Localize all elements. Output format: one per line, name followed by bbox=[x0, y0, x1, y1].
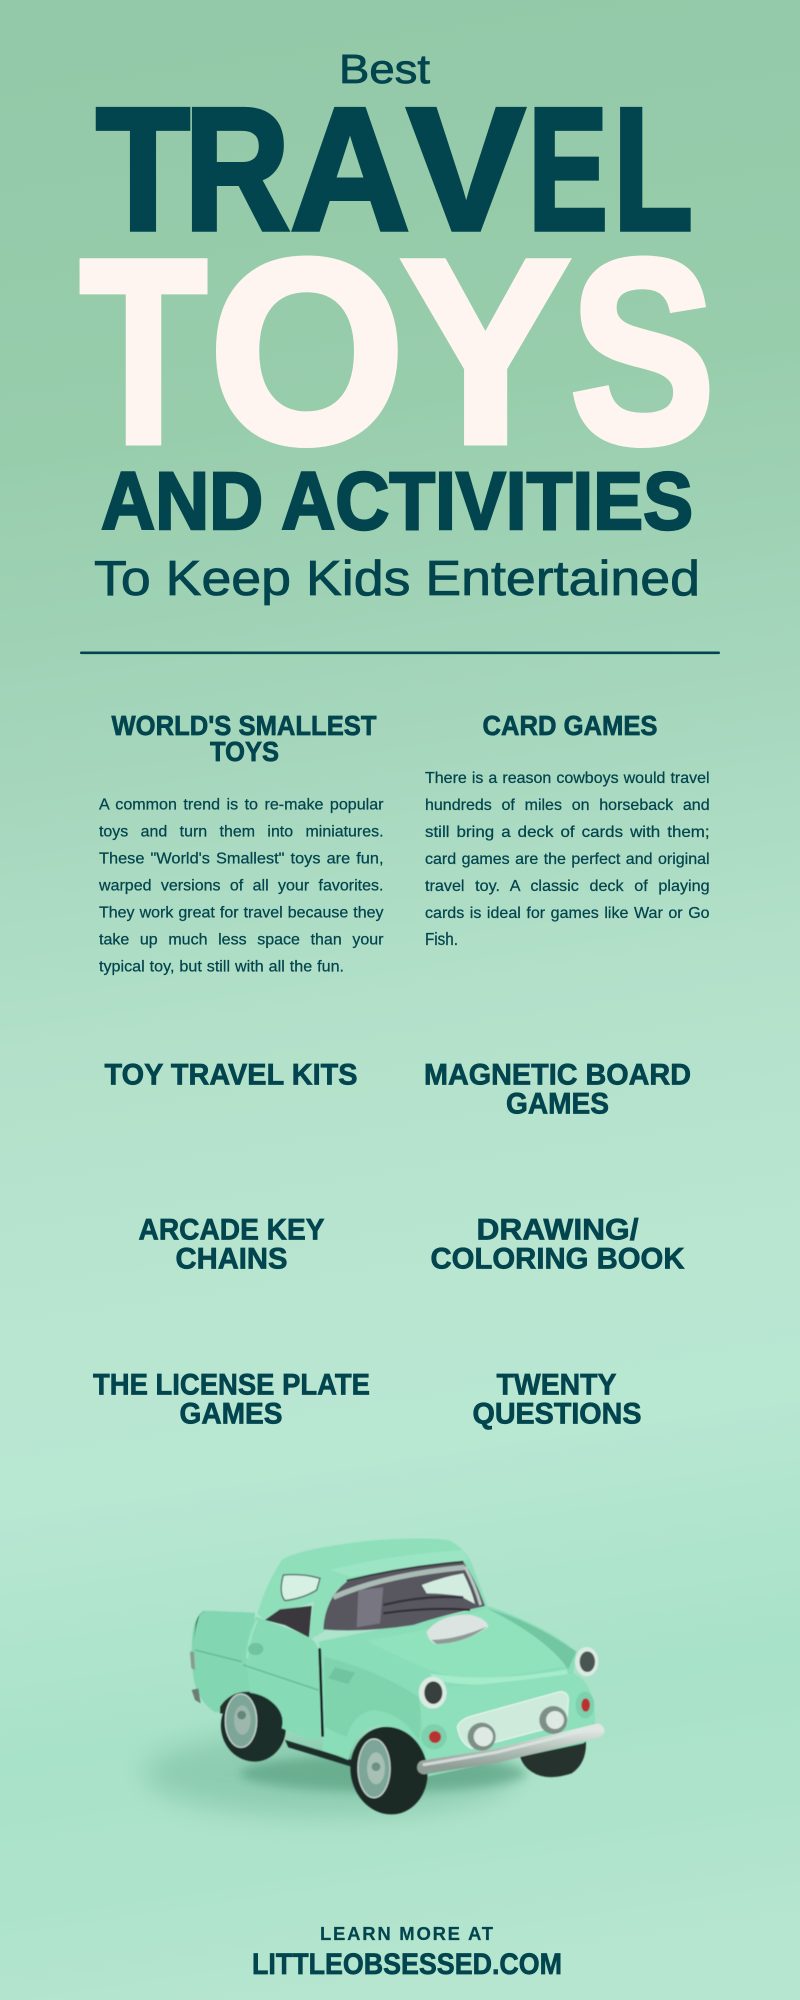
hood side fold bbox=[488, 1609, 576, 1669]
right indicator bbox=[576, 1692, 594, 1718]
heading: magnetic board games: MAGNETIC BOARD bbox=[424, 1058, 691, 1091]
text block: world's smallest toys: typical toy, but still with all the fun. bbox=[99, 958, 344, 976]
panel: card games bbox=[425, 710, 710, 949]
title bbox=[80, 46, 715, 606]
rear wheel bbox=[214, 1686, 292, 1768]
fog lamps bbox=[468, 1706, 567, 1751]
website: LITTLEOBSESSED.COM bbox=[252, 1948, 562, 1981]
hood scoop bbox=[427, 1615, 488, 1644]
text block: card games: travel toy. A classic deck of playing bbox=[425, 878, 710, 895]
heading: world's smallest toys: WORLD'S SMALLEST bbox=[112, 710, 377, 741]
title line: TRAVEL: L bbox=[613, 72, 693, 268]
heading: arcade key chains: ARCADE KEY bbox=[138, 1213, 324, 1246]
rear body bbox=[192, 1611, 255, 1712]
heading: toy travel kits: TOY TRAVEL KITS bbox=[104, 1058, 358, 1091]
side window bbox=[281, 1575, 320, 1601]
heading: magnetic board games: GAMES bbox=[506, 1087, 609, 1120]
main body bbox=[319, 1607, 603, 1777]
learn more at: LEARN MORE AT bbox=[320, 1923, 494, 1944]
under-door shadow bbox=[285, 1740, 352, 1767]
text block: world's smallest toys: warped versions of all your favorites. bbox=[98, 878, 384, 894]
title line: TOYS: Y bbox=[401, 205, 570, 498]
title line: TRAVEL: V bbox=[407, 72, 525, 268]
door gap bbox=[320, 1648, 323, 1737]
heading: drawing/coloring book: DRAWING/ bbox=[476, 1213, 639, 1246]
heading: the license plate games bbox=[93, 1368, 370, 1430]
roof and pillars bbox=[257, 1538, 488, 1640]
far front wheel bbox=[520, 1742, 586, 1777]
heading: twenty questions: TWENTY bbox=[496, 1368, 616, 1401]
roof highlight bbox=[330, 1550, 468, 1577]
front fascia bbox=[418, 1673, 595, 1767]
heading: arcade key chains bbox=[138, 1213, 324, 1275]
left headlight bbox=[419, 1677, 447, 1709]
front wheel bbox=[342, 1720, 436, 1822]
bumper bbox=[424, 1727, 597, 1767]
text block: card games: card games are the perfect and original bbox=[425, 851, 710, 868]
title line: TOYS: O bbox=[209, 205, 405, 498]
text block: card games: Fish. bbox=[425, 929, 458, 949]
heading: the license plate games: GAMES bbox=[180, 1397, 282, 1430]
subtitle: To Keep Kids Entertained bbox=[94, 552, 700, 606]
title line: Best: Best bbox=[339, 46, 431, 92]
fender shading bbox=[324, 1657, 421, 1740]
panel: world's smallest toys bbox=[98, 710, 384, 976]
heading: card games: CARD GAMES bbox=[482, 710, 658, 741]
title line: AND ACTIVITIES: AND ACTIVITIES bbox=[101, 456, 693, 547]
heading: twenty questions bbox=[472, 1368, 642, 1430]
heading: arcade key chains: CHAINS bbox=[176, 1242, 288, 1275]
heading: twenty questions: QUESTIONS bbox=[472, 1397, 642, 1430]
heading: drawing/coloring book bbox=[430, 1213, 685, 1275]
title line: TOYS: S bbox=[570, 205, 715, 498]
text block: world's smallest toys: take up much less space than your bbox=[99, 932, 384, 948]
side vent bbox=[328, 1667, 355, 1684]
heading: world's smallest toys: TOYS bbox=[210, 736, 279, 767]
title line: TRAVEL: R bbox=[184, 72, 290, 268]
text block: world's smallest toys bbox=[98, 796, 384, 976]
windshield bbox=[323, 1562, 485, 1630]
text block: world's smallest toys: They work great for travel because they bbox=[99, 904, 384, 922]
text block: world's smallest toys: These "World's Smallest" toys are fun, bbox=[99, 850, 384, 868]
text block: card games: cards is ideal for games like War or Go bbox=[425, 905, 710, 922]
heading: drawing/coloring book: COLORING BOOK bbox=[430, 1242, 685, 1275]
title line: TRAVEL: T bbox=[96, 72, 190, 268]
text block: card games: hundreds of miles on horseback and bbox=[425, 797, 710, 814]
grille bbox=[457, 1692, 568, 1748]
text block: world's smallest toys: toys and turn them into miniatures. bbox=[99, 824, 384, 840]
rear edge bbox=[193, 1611, 205, 1643]
title line: TRAVEL: E bbox=[528, 72, 608, 268]
left indicator bbox=[421, 1724, 447, 1749]
right headlight bbox=[575, 1647, 598, 1676]
heading: world's smallest toys bbox=[112, 710, 377, 767]
text block: card games: still bring a deck of cards with them; bbox=[425, 824, 710, 841]
hood bbox=[367, 1608, 566, 1680]
title line: TRAVEL: A bbox=[290, 72, 410, 268]
hood front crease bbox=[430, 1669, 568, 1685]
interior bbox=[265, 1606, 312, 1637]
heading: magnetic board games bbox=[424, 1058, 691, 1120]
text block: card games bbox=[425, 770, 710, 949]
text block: world's smallest toys: A common trend is to re-make popular bbox=[99, 796, 384, 814]
door bbox=[243, 1617, 321, 1739]
text block: card games: There is a reason cowboys would travel bbox=[425, 770, 710, 787]
title line: TOYS: T bbox=[80, 205, 207, 498]
illustration: toy car bbox=[143, 1538, 603, 1822]
heading: the license plate games: THE LICENSE PLATE bbox=[93, 1368, 370, 1401]
car shadow bbox=[143, 1730, 527, 1817]
footer bbox=[252, 1923, 562, 1981]
